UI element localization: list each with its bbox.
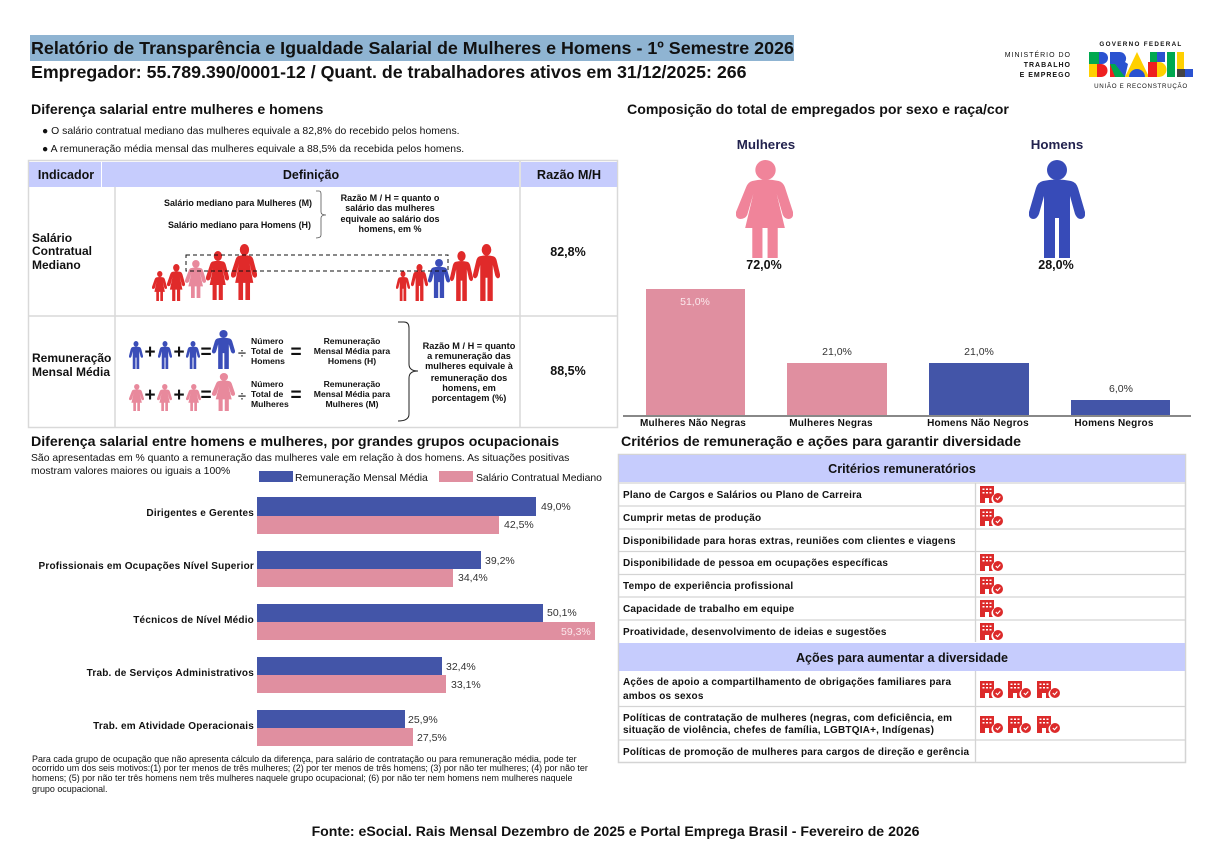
group: técnicos: 50,1% [547,607,577,619]
definition labels: Salário mediano para Homens (H) [168,220,311,230]
definition labels: Salário mediano para Mulheres (M) [164,198,312,208]
rows: ações: situação de violência, chefes de família, LGBTQIA+, Indígenas) [623,725,934,736]
table header [29,162,617,187]
footnote: ocorrido um dos seis motivos:(1) por ter menos de três mulheres; (2) por ter menos de três homens; (3) por não ter mulheres; (4) por não ter [32,763,588,773]
rows: critérios: Plano de Cargos e Salários ou Plano de Carreira [623,490,862,501]
men figures [396,244,500,301]
group: operacionais: 27,5% [417,732,447,744]
razão text 1 [340,193,440,234]
women formula [129,373,390,411]
men formula: + [144,342,156,363]
bar chart: raça/cor: 21,0% [964,346,994,358]
group: administrativos: 32,4% [446,661,476,673]
women formula: + [144,385,156,406]
note text [31,453,569,477]
I [1167,52,1175,77]
logo: ministério: E EMPREGO [1020,72,1071,79]
men formula: Homens [251,356,285,366]
bar chart: raça/cor [623,289,1191,429]
group: operacionais: 25,9% [408,714,438,726]
dashed median box [186,255,448,271]
group: profissionais: 34,4% [458,572,488,584]
rows: ações: Políticas de contratação de mulheres (negras, com deficiência, em [623,713,952,724]
group: dirigentes: 42,5% [504,519,534,531]
rows: critérios: Disponibilidade de pessoa em ocupações específicas [623,558,888,569]
value 88,5%: 88,5% [550,364,586,378]
icon: man [1029,160,1085,258]
header: ações: Ações para aumentar a diversidade [796,651,1008,665]
women formula: Mensal Média para [314,389,390,399]
women formula: = [290,385,302,406]
men formula: Mensal Média para [314,346,390,356]
source: Fonte: eSocial. Rais Mensal Dezembro de 2025 e Portal Emprega Brasil - Fevereiro de 2026 [312,823,920,839]
bar chart: raça/cor: Mulheres Não Negras [640,418,746,429]
A [1125,52,1149,77]
logo: governo federal [1089,41,1193,90]
rows: critérios: Disponibilidade para horas extras, reuniões com clientes e viagens [623,536,956,547]
row label: salário contratual mediano: Contratual [32,244,92,258]
title: Relatório de Transparência e Igualdade Salarial de Mulheres e Homens - 1º Semestre 2026 [31,38,794,58]
group: profissionais: 39,2% [485,555,515,567]
L [1177,52,1184,69]
men formula: + [173,342,185,363]
row label: remuneração mensal média: Mensal Média [32,365,110,379]
heading: composição: Composição do total de empregados por sexo e raça/cor [627,101,1009,117]
razão text 1: homens, em % [358,224,422,234]
value 28,0%: 28,0% [1038,258,1074,272]
bar chart: grupos ocupacionais [38,497,595,746]
value 82,8%: 82,8% [550,245,586,259]
group: administrativos: 33,1% [451,679,481,691]
bar chart: raça/cor: Homens Negros [1074,418,1154,429]
panel: tabela indicadores [28,160,618,428]
row label: salário contratual mediano [32,231,92,272]
S [1150,52,1157,62]
bar chart: raça/cor: 21,0% [822,346,852,358]
table header: Indicador [38,168,94,182]
razão text 1: salário das mulheres [345,203,435,213]
razão text 2: Razão M / H = quanto [423,341,516,351]
rows: critérios: Capacidade de trabalho em equipe [623,604,795,615]
bar chart: raça/cor: Mulheres Negras [789,418,873,429]
value 72,0%: 72,0% [746,258,782,272]
legend [259,471,602,484]
legend: Salário Contratual Mediano [476,473,602,484]
men formula: Remuneração [324,336,380,346]
row label: remuneração mensal média [32,351,111,379]
B [1089,52,1099,64]
logo: governo federal: GOVERNO FEDERAL [1099,41,1183,48]
rows: ações [623,677,970,758]
bar chart: raça/cor: 51,0% [680,296,710,308]
header: ações [619,643,1185,671]
logo: ministério [1005,50,1071,79]
heading: diferença salarial: Diferença salarial entre mulheres e homens [31,101,324,117]
icon: woman [736,160,793,258]
rows: critérios [623,490,956,638]
razão text 2: remuneração dos [431,373,507,383]
women formula: + [173,385,185,406]
rows: ações: Ações de apoio a compartilhamento de obrigações familiares para [623,677,951,688]
icons: critérios [980,486,1003,640]
razão text 2 [423,341,516,403]
men formula: Homens (H) [328,356,376,366]
women formula: ÷ [238,388,246,405]
note text: mostram valores maiores ou iguais a 100% [31,466,230,477]
bullet texts [42,126,464,155]
footnote [32,754,588,794]
bullet texts: ● O salário contratual mediano das mulheres equivale a 82,8% do recebido pelos homens. [42,126,460,137]
group: dirigentes: Dirigentes e Gerentes [146,508,254,519]
header: critérios remuneratórios [619,455,1185,482]
R [1110,52,1128,77]
men formula: = [290,342,302,363]
group: operacionais: Trab. em Atividade Operacionais [93,721,254,732]
row label: salário contratual mediano: Mediano [32,258,81,272]
women formula: Mulheres [251,399,289,409]
heading: grupos ocupacionais: Diferença salarial entre homens e mulheres, por grandes grupos ocupacionais [31,433,559,449]
footnote: homens; (5) por não ter três homens nem três mulheres naquele grupo ocupacional; (6) por não ter nem homens nem mulheres naquele [32,773,573,783]
icons: ações [980,681,1060,733]
rows: critérios: Tempo de experiência profissional [623,581,793,592]
logo: ministério: TRABALHO [1024,62,1071,69]
group: técnicos: 59,3% [561,626,591,638]
bar chart: raça/cor: Homens Não Negros [927,418,1029,429]
men formula: = [200,342,212,363]
legend: Remuneração Mensal Média [295,473,428,484]
rows: ações: ambos os sexos [623,691,704,702]
label: homens: Homens [1031,137,1083,152]
group: administrativos [87,657,481,693]
group: dirigentes: 49,0% [541,501,571,513]
header: critérios remuneratórios: Critérios remuneratórios [828,462,976,476]
men formula: Número [251,336,283,346]
bullet texts: ● A remuneração média mensal das mulheres equivale a 88,5% da recebida pelos homens. [42,144,464,155]
razão text 1: equivale ao salário dos [340,214,440,224]
razão text 2: a remuneração das [427,351,511,361]
rows: ações: Políticas de promoção de mulheres para cargos de direção e gerência [623,747,970,758]
label: mulheres: Mulheres [737,137,795,152]
group: profissionais [38,551,515,587]
footnote: grupo ocupacional. [32,784,108,794]
rows: critérios: Cumprir metas de produção [623,513,761,524]
men formula [129,330,390,369]
women formula: = [200,385,212,406]
razão text 2: mulheres equivale à [425,361,514,371]
group: profissionais: Profissionais em Ocupações Nível Superior [38,561,254,572]
definition labels [164,198,312,230]
men formula: ÷ [238,345,246,362]
logo: governo federal: UNIÃO E RECONSTRUÇÃO [1094,83,1188,90]
women formula: Mulheres (M) [326,399,379,409]
note text: São apresentadas em % quanto a remuneração das mulheres vale em relação à dos homens. As situações positivas [31,453,569,464]
brace [316,191,326,238]
women figures [152,244,257,301]
razão text 1: Razão M / H = quanto o [341,193,440,203]
heading: critérios: Critérios de remuneração e ações para garantir diversidade [621,433,1021,449]
bar chart: raça/cor: 6,0% [1109,383,1133,395]
row label: remuneração mensal média: Remuneração [32,351,111,365]
razão text 2: porcentagem (%) [432,393,506,403]
group: administrativos: Trab. de Serviços Administrativos [87,668,254,679]
group: operacionais [93,710,447,746]
table header: Razão M/H [537,168,601,182]
group: dirigentes [146,497,571,534]
row label: salário contratual mediano: Salário [32,231,72,245]
logo: ministério: MINISTÉRIO DO [1005,50,1071,59]
men formula: Total de [251,346,284,356]
women formula: Número [251,379,283,389]
big brace [398,322,418,421]
employer subtitle: Empregador: 55.789.390/0001-12 / Quant. de trabalhadores ativos em 31/12/2025: 266 [31,62,747,82]
footnote: Para cada grupo de ocupação que não apresenta cálculo da diferença, para salário de contratação ou para remuneração média, pode ter [32,754,577,764]
table header: Definição [283,168,339,182]
women formula: Total de [251,389,284,399]
rows: critérios: Proatividade, desenvolvimento de ideias e sugestões [623,627,887,638]
razão text 2: homens, em [442,383,496,393]
panel: critérios table [618,454,1186,762]
group: técnicos [133,604,595,640]
women formula: Remuneração [324,379,380,389]
group: técnicos: Técnicos de Nível Médio [133,615,254,626]
